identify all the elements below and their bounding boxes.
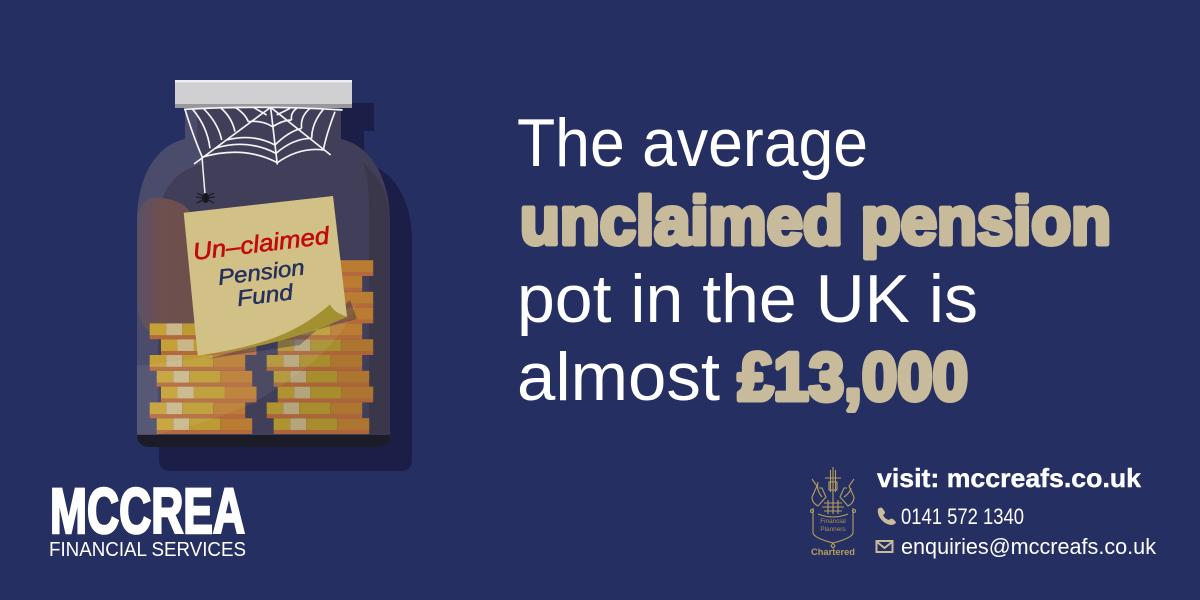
chartered crest: [810, 467, 856, 557]
headline line 1: The average: [517, 105, 868, 181]
headline line 3: pot in the UK is: [517, 261, 978, 337]
logo subtitle: FINANCIAL SERVICES: [49, 538, 246, 561]
note text: Un-claimed: Un–claimed: [191, 222, 331, 266]
logo wordmark: MCCREA: [50, 475, 245, 547]
icon: phone: [878, 508, 896, 525]
website: visit: mccreafs.co.uk: [877, 463, 1142, 493]
crest text: Financial: Financial: [820, 518, 846, 525]
spider: [196, 193, 215, 203]
glass jar body: [137, 108, 390, 447]
lid: [175, 80, 352, 108]
jar illustration: [137, 80, 412, 471]
jar base: [137, 435, 390, 447]
sticky note: [184, 196, 347, 356]
contact details: [876, 463, 1157, 559]
email address: enquiries@mccreafs.co.uk: [901, 534, 1157, 559]
crest text: Chartered: Chartered: [811, 547, 855, 557]
phone number: 0141 572 1340: [901, 504, 1024, 529]
brown reflection: [137, 198, 200, 340]
icon: envelope: [876, 541, 892, 552]
crest text: Planners: Planners: [820, 526, 846, 533]
jar left glass reflection: [137, 108, 205, 435]
coin stack: left: [150, 323, 256, 434]
note text: Fund: Fund: [236, 279, 295, 311]
headline amount: £13,000: [738, 339, 968, 415]
coin stack: right: [267, 260, 373, 434]
logo: [49, 475, 246, 561]
spider thread: [202, 157, 205, 194]
note shadow: [207, 300, 357, 359]
headline line 2: unclaimed pension: unclaimed pension: [520, 183, 1111, 259]
glass sweep highlight: [137, 303, 357, 434]
headline: [517, 105, 1111, 415]
crest linework: [810, 467, 856, 548]
jar shadow: [159, 103, 412, 471]
headline line 4: almost: [517, 339, 720, 415]
note curl: [198, 304, 347, 356]
spider web: [184, 107, 343, 165]
jar right glass band: [363, 163, 390, 435]
note text: Pension: Pension: [217, 255, 306, 290]
